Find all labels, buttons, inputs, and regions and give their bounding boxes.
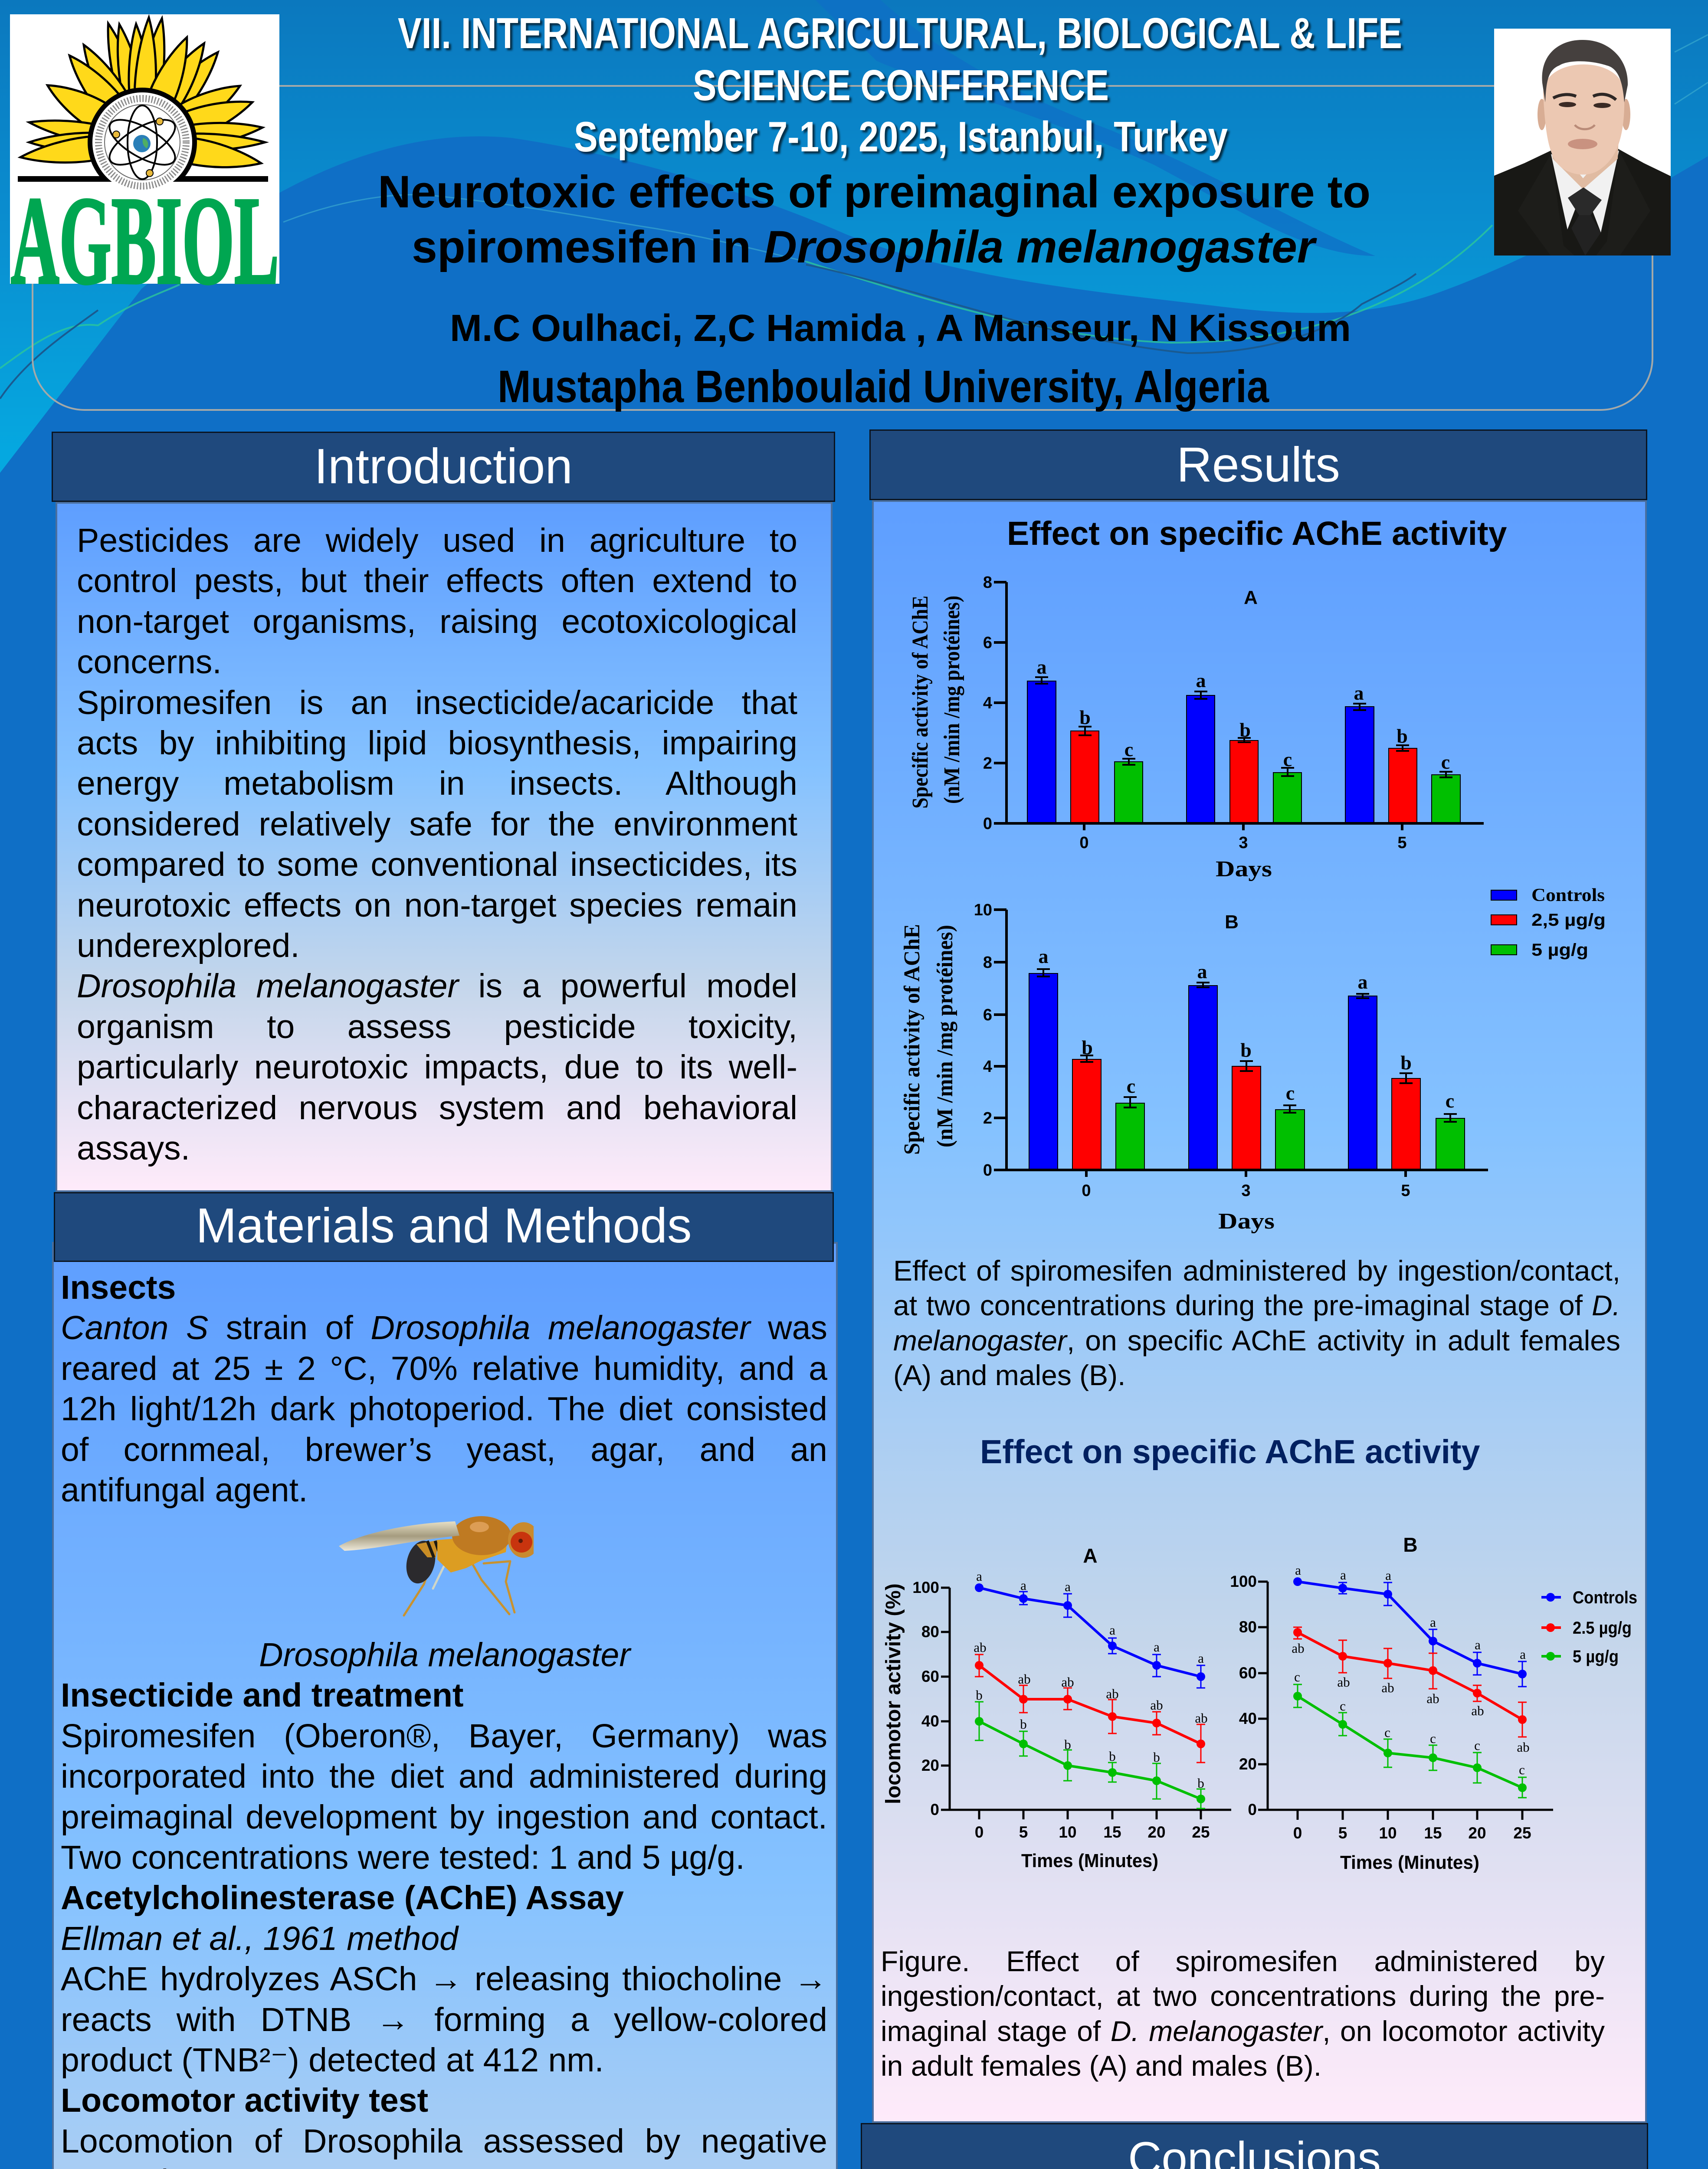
line chart A: a: [1020, 1578, 1026, 1593]
authors: M.C Oulhaci, Z,C Hamida , A Manseur, N Kissoum: [450, 307, 1351, 349]
bar chart B: b: [1240, 1039, 1252, 1061]
bar chart B: 6: [983, 1006, 992, 1024]
introduction text: underexplored.: [77, 927, 300, 964]
text: insecticide and AChE and locomotor sections: Spiromesifen (Oberon®, Bayer, Germany) was: [61, 1717, 827, 1755]
line chart A: [882, 1544, 1231, 1871]
text: insecticide and AChE and locomotor sections: reacts with DTNB → forming a yellow-colored: [61, 2001, 827, 2038]
bar chart A: b: [1079, 706, 1091, 728]
poster title: spiromesifen in Drosophila melanogaster: [412, 222, 1317, 272]
bar chart A: [908, 573, 1484, 881]
line chart A: 20: [1147, 1823, 1166, 1841]
line chart B: 25: [1513, 1824, 1531, 1842]
line chart B: 0: [1293, 1824, 1302, 1842]
bar chart B: Days: [1218, 1209, 1275, 1234]
bar chart B: 5: [1401, 1182, 1410, 1200]
line chart A: b: [1197, 1776, 1204, 1791]
series: 2.5 µg/g: [1293, 1627, 1527, 1737]
line chart B: 40: [1239, 1710, 1257, 1727]
line chart B: Times (Minutes): [1340, 1852, 1479, 1873]
line chart A: 10: [1059, 1823, 1077, 1841]
introduction text: concerns.: [77, 643, 222, 681]
heading: materials and methods: [54, 1192, 834, 1262]
conference name and date: SCIENCE CONFERENCE: [693, 61, 1109, 110]
line chart B: 0: [1248, 1801, 1257, 1818]
introduction text: compared to some conventional insecticides, its: [77, 846, 797, 883]
line chart A: A: [1083, 1544, 1098, 1567]
introduction text: characterized nervous system and behavioral: [77, 1089, 797, 1127]
introduction text: Drosophila melanogaster is a powerful model: [77, 967, 797, 1005]
line chart B: c: [1384, 1725, 1390, 1740]
panel: introduction: [56, 502, 833, 1192]
line chart A: a: [1109, 1622, 1115, 1638]
introduction text: organism to assess pesticide toxicity,: [77, 1008, 797, 1045]
bar chart legend: 2,5 µg/g: [1531, 911, 1606, 930]
line chart B: c: [1340, 1698, 1346, 1714]
poster title: Neurotoxic effects of preimaginal exposure to: [378, 167, 1370, 217]
bar chart B: c: [1446, 1090, 1454, 1112]
bar chart B: 3: [1241, 1182, 1251, 1200]
conference name and date: [398, 9, 1402, 161]
line chart B: c: [1430, 1731, 1436, 1746]
bar chart A: (nM /min /mg protéines): [940, 596, 964, 804]
text: insecticide and AChE and locomotor sections: AChE hydrolyzes ASCh → releasing thiocholine →: [61, 1960, 827, 1998]
caption: Drosophila melanogaster: Drosophila melanogaster: [259, 1636, 630, 1674]
line chart A: 5: [1019, 1823, 1028, 1841]
introduction text: non-target organisms, raising ecotoxicological: [77, 603, 797, 640]
bar chart A: 0: [983, 815, 992, 833]
header: conference titles, logo and portrait: [0, 0, 1708, 429]
line chart B: 80: [1239, 1618, 1257, 1636]
bar chart A: A: [1244, 587, 1258, 608]
introduction text: control pests, but their effects often extend to: [77, 562, 797, 600]
line chart A: ab: [1195, 1710, 1208, 1726]
line chart legend: [1541, 1588, 1637, 1666]
heading: introduction: Introduction: [314, 439, 573, 494]
bar chart B: a: [1039, 945, 1048, 967]
line chart B: ab: [1381, 1680, 1394, 1695]
series: controls: [1293, 1577, 1527, 1687]
text: insecticide and AChE and locomotor sections: preimaginal development by ingestion and contact.: [61, 1799, 827, 1836]
line chart A: a: [1065, 1579, 1071, 1594]
line charts: [881, 1524, 1640, 1880]
line chart B: a: [1520, 1647, 1526, 1662]
text: insecticide and AChE and locomotor sections: incorporated into the diet and administered during: [61, 1758, 827, 1795]
text: insecticide and AChE and locomotor sections: Ellman et al., 1961 method: [61, 1920, 458, 1957]
introduction text: [77, 521, 797, 1169]
bar chart A: a: [1196, 669, 1206, 691]
heading: materials and methods: Materials and Methods: [196, 1198, 692, 1253]
line chart B: [1230, 1533, 1553, 1873]
bar chart B: c: [1286, 1082, 1295, 1104]
bar chart B: a: [1358, 971, 1367, 993]
line chart A: b: [976, 1687, 983, 1703]
caption: locomotor figure: ingestion/contact, at two concentrations during the pre-: [881, 1980, 1605, 2012]
caption: AChE figure: Effect of spiromesifen administered by ingestion/contact,: [893, 1255, 1620, 1287]
bar chart A: 5: [1397, 834, 1407, 852]
bar chart B: c: [1127, 1075, 1135, 1097]
caption: locomotor figure: Figure. Effect of spiromesifen administered by: [881, 1945, 1605, 1977]
bar chart A: Days: [1216, 857, 1272, 881]
line chart B: 15: [1424, 1824, 1442, 1842]
bar chart A: a: [1037, 656, 1046, 678]
line chart A: 40: [921, 1712, 939, 1730]
line chart A: ab: [974, 1640, 987, 1655]
text: insects: Insects: [61, 1269, 176, 1306]
line chart B: 20: [1468, 1824, 1486, 1842]
bar chart A: 3: [1239, 834, 1248, 852]
bar chart B: a: [1197, 960, 1207, 983]
heading: results: Results: [1177, 437, 1340, 492]
line chart A: ab: [1061, 1674, 1074, 1690]
introduction text: energy metabolism in insects. Although: [77, 765, 797, 802]
panel: results: [872, 500, 1647, 2123]
line chart A: ab: [1106, 1686, 1119, 1701]
text: insects: of cornmeal, brewer’s yeast, agar, and an: [61, 1431, 827, 1468]
series: 2.5 µg/g: [975, 1655, 1205, 1763]
bar chart A: c: [1124, 738, 1133, 760]
text: insects: reared at 25 ± 2 °C, 70% relative humidity, and a: [61, 1350, 827, 1387]
line chart legend: 5 µg/g: [1573, 1647, 1619, 1666]
line chart A: a: [1154, 1639, 1160, 1655]
text: insecticide and AChE and locomotor sections: Locomotion of Drosophila assessed by negative: [61, 2123, 827, 2160]
bar chart B: 0: [1082, 1182, 1091, 1200]
line chart B: a: [1340, 1567, 1346, 1583]
line chart A: 0: [975, 1823, 983, 1841]
line chart B: ab: [1337, 1674, 1350, 1690]
introduction text: neurotoxic effects on non-target species remain: [77, 887, 797, 924]
heading: results: [869, 429, 1647, 500]
panel: materials and methods: [52, 1242, 838, 2169]
conference name and date: September 7-10, 2025, Istanbul, Turkey: [574, 113, 1228, 161]
background waves: [0, 0, 1708, 477]
line chart A: b: [1153, 1750, 1160, 1765]
caption: AChE figure: (A) and males (B).: [893, 1359, 1125, 1391]
bar chart B: 2: [983, 1109, 992, 1127]
introduction text: assays.: [77, 1130, 190, 1167]
bar chart B: (nM /min /mg protéines): [933, 925, 957, 1147]
bar chart A: c: [1283, 748, 1292, 770]
line chart A: a: [1198, 1651, 1204, 1666]
bar chart B: 4: [983, 1058, 992, 1076]
bar charts: [902, 574, 1640, 1311]
bar chart legend: 5 µg/g: [1531, 940, 1588, 960]
introduction text: Pesticides are widely used in agriculture to: [77, 522, 797, 559]
heading: introduction: [52, 432, 835, 502]
line chart A: b: [1020, 1717, 1027, 1732]
line chart B: 20: [1239, 1755, 1257, 1773]
bar chart B: b: [1082, 1036, 1093, 1058]
bar chart A: b: [1397, 725, 1408, 747]
line chart A: 0: [930, 1801, 939, 1818]
line chart A: a: [976, 1569, 982, 1584]
affiliation: Mustapha Benboulaid University, Algeria: [498, 361, 1269, 412]
bar chart A: 2: [983, 754, 992, 773]
text: insecticide and AChE and locomotor sections: Insecticide and treatment: [61, 1677, 464, 1714]
introduction text: particularly neurotoxic impacts, due to its well-: [77, 1048, 797, 1086]
line chart B: ab: [1471, 1703, 1484, 1718]
bar chart B: [900, 901, 1488, 1234]
series: controls: [975, 1583, 1205, 1688]
line chart B: 10: [1379, 1824, 1397, 1842]
conference name and date: VII. INTERNATIONAL AGRICULTURAL, BIOLOGICAL & LIFE: [398, 9, 1402, 58]
heading: second effect title: Effect on specific AChE activity: [980, 1433, 1480, 1471]
line chart B: a: [1295, 1563, 1301, 1578]
line chart A: 80: [921, 1623, 939, 1641]
line chart A: ab: [1018, 1671, 1031, 1687]
line chart B: ab: [1517, 1740, 1530, 1755]
poster title: [378, 167, 1370, 272]
line chart A: Times (Minutes): [1021, 1850, 1158, 1871]
line chart legend: 2.5 µg/g: [1573, 1619, 1632, 1638]
line chart A: 100: [912, 1579, 939, 1596]
line chart A: 60: [921, 1668, 939, 1685]
bar chart A: b: [1239, 719, 1251, 741]
bar chart B: 8: [983, 953, 992, 972]
line chart B: 5: [1338, 1824, 1347, 1842]
series: 5 µg/g: [975, 1702, 1205, 1809]
line chart A: b: [1064, 1737, 1071, 1752]
text: insecticide and AChE and locomotor sections: Acetylcholinesterase (AChE) Assay: [61, 1879, 624, 1917]
text: insects: antifungal agent.: [61, 1471, 308, 1509]
series: 5 µg/g: [1293, 1684, 1527, 1798]
caption: AChE figure: [893, 1253, 1620, 1392]
bar chart B: B: [1225, 911, 1239, 933]
line chart B: ab: [1292, 1641, 1305, 1656]
text: insecticide and AChE and locomotor sections: product (TNB²⁻) detected at 412 nm.: [61, 2041, 604, 2079]
line chart B: c: [1519, 1762, 1525, 1777]
caption: AChE figure: at two concentrations during the pre-imaginal stage of D.: [893, 1289, 1620, 1321]
bar chart A: 6: [983, 634, 992, 652]
line chart B: c: [1474, 1738, 1480, 1753]
caption: locomotor figure: imaginal stage of D. melanogaster, on locomotor activity: [881, 2015, 1605, 2047]
introduction text: considered relatively safe for the environment: [77, 806, 797, 843]
line chart B: 100: [1230, 1573, 1257, 1590]
text: insects: [61, 1268, 827, 1510]
bar chart B: b: [1400, 1052, 1412, 1074]
line chart A: ab: [1150, 1697, 1163, 1713]
text: insects: 12h light/12h dark photoperiod. The diet consisted: [61, 1390, 827, 1428]
line chart B: a: [1475, 1637, 1481, 1652]
line chart B: B: [1403, 1533, 1418, 1556]
caption: locomotor figure: in adult females (A) and males (B).: [881, 2050, 1321, 2082]
heading: conclusions: [861, 2123, 1648, 2169]
text: insects: Canton S strain of Drosophila melanogaster was: [61, 1309, 827, 1347]
line chart A: 20: [921, 1756, 939, 1774]
caption: AChE figure: melanogaster, on specific AChE activity in adult females: [893, 1324, 1620, 1356]
bar chart A: 0: [1079, 834, 1089, 852]
bar chart legend: [1491, 885, 1606, 960]
text: insecticide and AChE and locomotor sections: Two concentrations were tested: 1 and 5 µg/g.: [61, 1839, 745, 1876]
line chart A: b: [1109, 1749, 1116, 1764]
introduction text: acts by inhibiting lipid biosynthesis, impairing: [77, 724, 797, 762]
line chart A: locomotor activity (%): [882, 1583, 905, 1804]
line chart B: ab: [1426, 1691, 1439, 1706]
bar chart A: c: [1441, 751, 1450, 773]
line chart B: 60: [1239, 1664, 1257, 1682]
text: insecticide and AChE and locomotor sections: [61, 1635, 827, 2169]
introduction text: Spiromesifen is an insecticide/acaricide that: [77, 684, 797, 721]
bar chart B: 10: [974, 901, 992, 919]
line chart A: 15: [1103, 1823, 1121, 1841]
bar chart A: 8: [983, 574, 992, 592]
portrait photo: [1494, 29, 1671, 256]
logo: AGBIOL sunflower: AGBIOL: [11, 171, 279, 310]
caption: locomotor figure: [881, 1944, 1605, 2083]
heading: effect on specific AChE activity: Effect on specific AChE activity: [1007, 515, 1507, 552]
text: insecticide and AChE and locomotor sections: Locomotor activity test: [61, 2082, 428, 2119]
bar chart legend: Controls: [1531, 885, 1605, 905]
line chart B: a: [1385, 1568, 1391, 1583]
line chart B: c: [1294, 1669, 1300, 1684]
logo: AGBIOL sunflower: [10, 14, 279, 310]
bar chart A: Specific activity of AChE: [908, 596, 933, 809]
line chart B: a: [1430, 1615, 1436, 1630]
line chart A: 25: [1192, 1823, 1210, 1841]
bar chart B: 0: [983, 1161, 992, 1180]
bar chart A: 4: [983, 694, 992, 712]
icon: drosophila fly: [334, 1515, 534, 1628]
bar chart A: a: [1354, 682, 1364, 704]
